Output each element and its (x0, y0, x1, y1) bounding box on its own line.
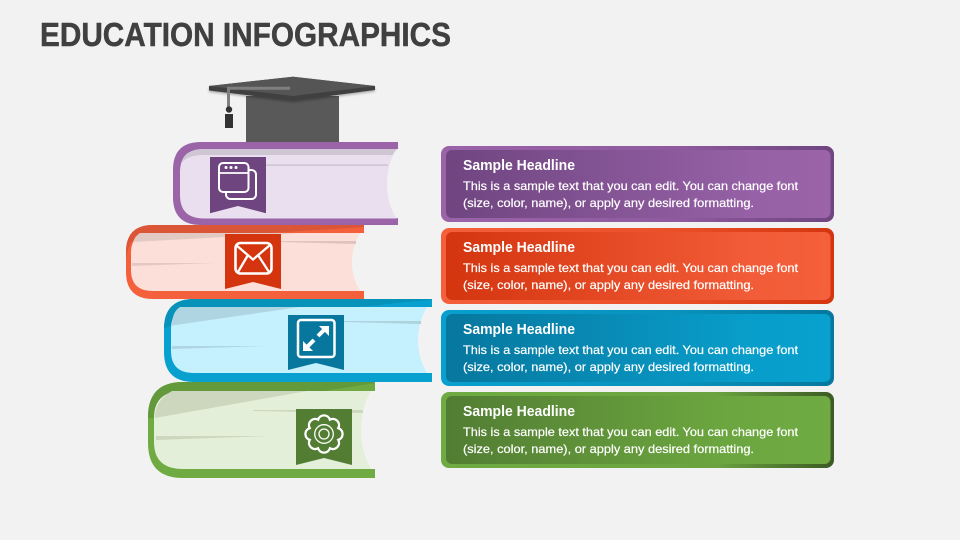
headline: Sample Headline (463, 404, 575, 420)
panel: blue (441, 310, 834, 386)
bookmark: red with envelope icon (225, 234, 281, 289)
book: blue (164, 299, 432, 382)
body text: (size, color, name), or apply any desired formatting. (463, 278, 754, 292)
bookmark: blue with expand icon (288, 315, 344, 370)
body text: (size, color, name), or apply any desired formatting. (463, 360, 754, 374)
bookmark: green with gear icon (296, 409, 352, 465)
body text: This is a sample text that you can edit. You can change font (463, 179, 799, 193)
panel: green (441, 392, 834, 468)
panel: purple (441, 146, 834, 222)
body text: This is a sample text that you can edit. You can change font (463, 261, 799, 275)
body text: This is a sample text that you can edit. You can change font (463, 343, 799, 357)
book: red (126, 225, 364, 299)
headline: Sample Headline (463, 240, 575, 256)
body text: (size, color, name), or apply any desired formatting. (463, 442, 754, 456)
icon: graduation cap (209, 77, 375, 142)
title: EDUCATION INFOGRAPHICS (40, 16, 451, 53)
book: purple (173, 142, 398, 225)
headline: Sample Headline (463, 322, 575, 338)
book: green (148, 382, 375, 478)
bookmark: purple with windows icon (210, 157, 266, 213)
panel: red (441, 228, 834, 304)
body text: This is a sample text that you can edit. You can change font (463, 425, 799, 439)
body text: (size, color, name), or apply any desired formatting. (463, 196, 754, 210)
headline: Sample Headline (463, 158, 575, 174)
